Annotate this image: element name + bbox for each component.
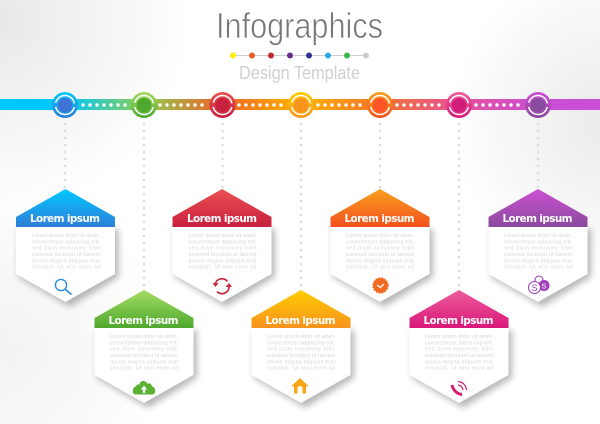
heading: Lorem ipsum xyxy=(30,213,100,225)
body text xyxy=(110,334,179,372)
body text: dolore magna aliquam erat xyxy=(346,258,415,264)
body text: volutpat. Ut wisi enim ad xyxy=(32,265,100,271)
node 3 xyxy=(210,92,236,118)
body text: sed diam nonummy nibh xyxy=(425,347,493,353)
icon: coins: S xyxy=(532,283,538,293)
body text: volutpat. Ut wisi enim ad xyxy=(504,265,572,271)
header xyxy=(330,189,430,227)
node 5 xyxy=(367,92,393,118)
heading: Lorem ipsum xyxy=(344,213,414,225)
body text xyxy=(32,233,101,271)
body text: sed diam nonummy nibh xyxy=(504,246,572,252)
heading: Lorem ipsum xyxy=(187,213,257,225)
body text: euismod tincidunt ut laoreet xyxy=(110,353,179,359)
body text xyxy=(425,334,494,372)
subtitle: Design Template xyxy=(239,62,360,83)
body text xyxy=(504,233,573,271)
body text xyxy=(346,233,415,271)
body text: dolore magna aliquam erat xyxy=(32,258,101,264)
timeline nodes xyxy=(52,92,551,118)
body text: volutpat. Ut wisi enim ad xyxy=(188,265,257,271)
icon: coins xyxy=(528,276,549,294)
body text xyxy=(267,334,336,372)
body text: dolore magna aliquam erat xyxy=(267,359,336,365)
body text: sed diam nonummy nibh xyxy=(188,246,257,252)
body text: volutpat. Ut wisi enim ad xyxy=(425,366,493,372)
panel: red xyxy=(172,189,275,307)
icon: cloud upload xyxy=(133,381,155,394)
panel: purple xyxy=(488,189,591,307)
panel: yellow xyxy=(252,290,354,408)
icon: magnifier xyxy=(55,279,72,294)
body text: volutpat. Ut wisi enim ad xyxy=(346,265,414,271)
header xyxy=(252,290,350,328)
body text: euismod tincidunt ut laoreet xyxy=(267,353,336,359)
panel: orange xyxy=(330,189,433,307)
body text: Lorem ipsum dolor sit amet, xyxy=(346,233,414,239)
body text: sed diam nonummy nibh xyxy=(110,347,178,353)
body text: euismod tincidunt ut laoreet xyxy=(425,353,494,359)
body text: euismod tincidunt ut laoreet xyxy=(504,252,573,258)
panel: green xyxy=(94,290,197,408)
header xyxy=(16,189,115,227)
body text: sed diam nonummy nibh xyxy=(32,246,100,252)
body text: Lorem ipsum dolor sit amet, xyxy=(32,233,100,239)
body text: Lorem ipsum dolor sit amet, xyxy=(188,233,256,239)
icon: gear badge xyxy=(373,278,388,293)
body text: consectetuer adipiscing elit, xyxy=(267,340,335,346)
header xyxy=(488,189,588,227)
node 2 xyxy=(131,92,157,118)
body text: volutpat. Ut wisi enim ad xyxy=(267,366,335,372)
icon: sync arrows xyxy=(212,279,232,294)
body text: euismod tincidunt ut laoreet xyxy=(346,252,415,258)
node 1 xyxy=(52,92,78,118)
body text xyxy=(188,233,257,271)
body text: Lorem ipsum dolor sit amet, xyxy=(504,233,572,239)
node 4 xyxy=(288,92,314,118)
body text: Lorem ipsum dolor sit amet, xyxy=(110,334,178,340)
panel: blue xyxy=(16,189,118,307)
heading: Lorem ipsum xyxy=(108,315,178,327)
body text: euismod tincidunt ut laoreet xyxy=(188,252,257,258)
node 7 xyxy=(525,92,551,118)
header xyxy=(172,189,272,227)
body text: sed diam nonummy nibh xyxy=(267,347,335,353)
body text: consectetuer adipiscing elit, xyxy=(110,340,178,346)
body text: euismod tincidunt ut laoreet xyxy=(32,252,101,258)
header xyxy=(410,290,508,328)
body text: consectetuer adipiscing elit, xyxy=(346,239,414,245)
colored dot divider xyxy=(230,52,369,58)
dotted connectors xyxy=(65,124,538,289)
body text: Lorem ipsum dolor sit amet, xyxy=(267,334,335,340)
body text: dolore magna aliquam erat xyxy=(188,258,257,264)
body text: volutpat. Ut wisi enim ad xyxy=(110,366,178,372)
body text: dolore magna aliquam erat xyxy=(504,258,573,264)
body text: consectetuer adipiscing elit, xyxy=(32,239,100,245)
timeline bar dots xyxy=(83,103,519,107)
body text: Lorem ipsum dolor sit amet, xyxy=(425,334,493,340)
icon: home xyxy=(292,378,308,394)
heading: Lorem ipsum xyxy=(502,213,572,225)
heading: Lorem ipsum xyxy=(424,315,494,327)
icon: phone signal xyxy=(452,382,466,394)
heading: Lorem ipsum xyxy=(266,315,336,327)
body text: sed diam nonummy nibh xyxy=(346,246,414,252)
title: Infographics xyxy=(216,5,383,46)
body text: consectetuer adipiscing elit, xyxy=(504,239,572,245)
icon: coins: S xyxy=(542,282,547,290)
panel: pink xyxy=(410,290,512,408)
node 6 xyxy=(446,92,472,118)
body text: dolore magna aliquam erat xyxy=(110,359,179,365)
body text: consectetuer adipiscing elit, xyxy=(425,340,493,346)
timeline bar xyxy=(0,99,600,110)
body text: dolore magna aliquam erat xyxy=(425,359,494,365)
header xyxy=(94,290,194,328)
body text: consectetuer adipiscing elit, xyxy=(188,239,256,245)
